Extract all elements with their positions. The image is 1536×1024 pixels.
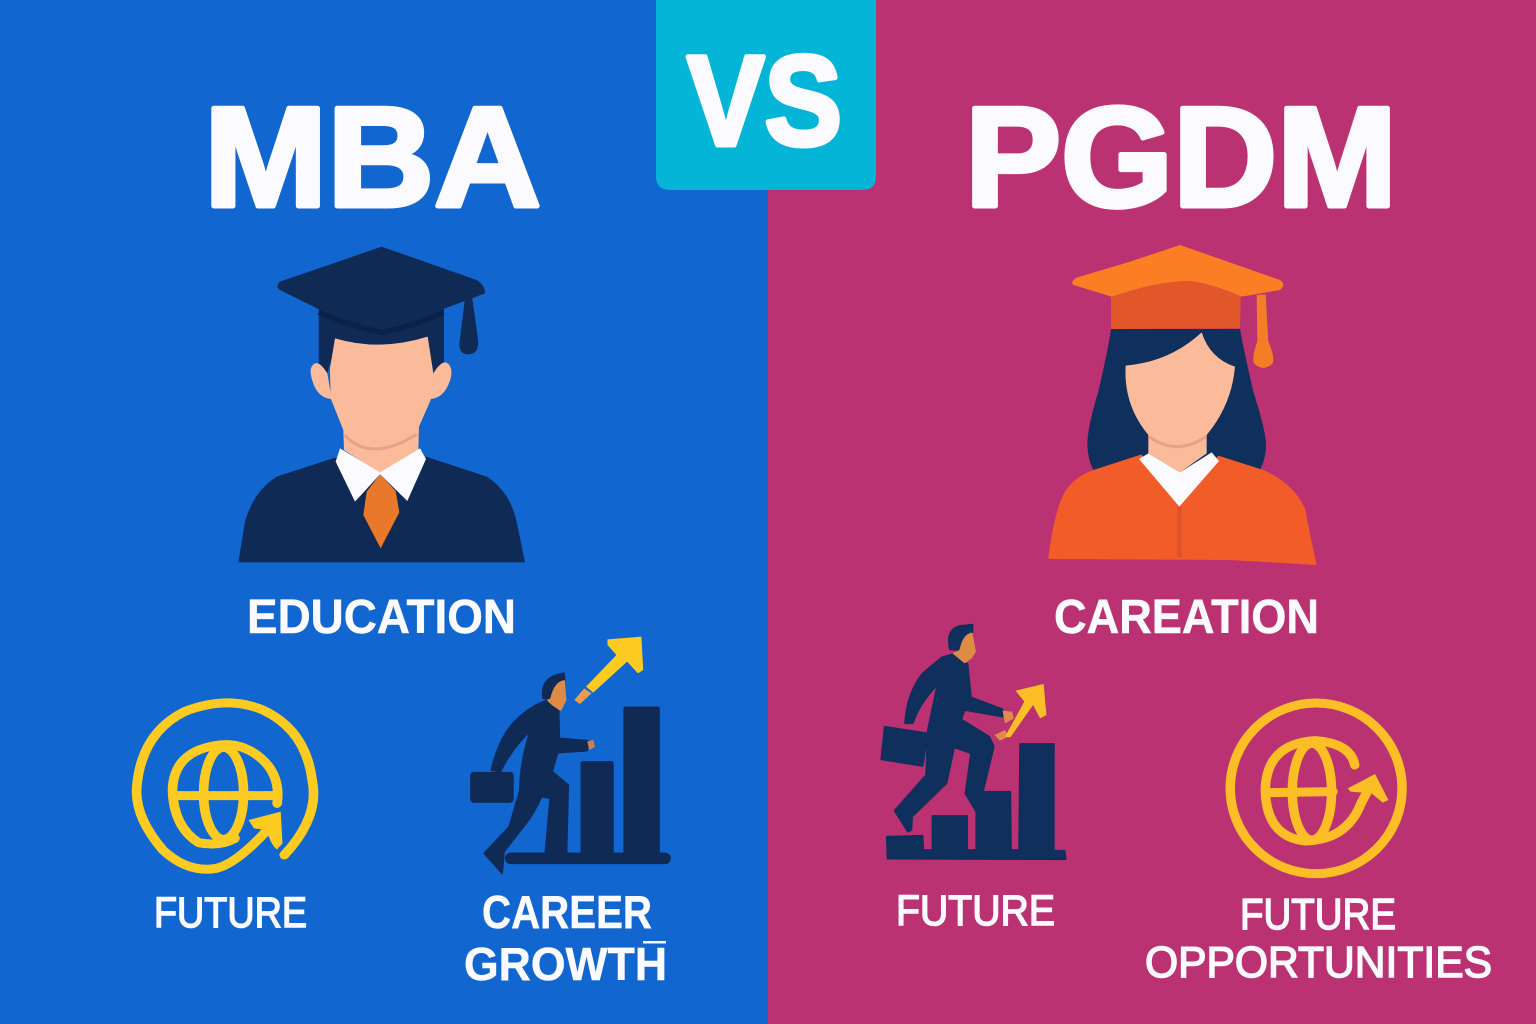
heading: MBA: MBA [204,78,541,237]
badge: VS: VS [687,30,842,173]
label: FUTURE (MBA): FUTURE [154,889,307,937]
icon: globe with arrow (PGDM) [1230,703,1402,874]
icon: career growth figure (PGDM) [881,625,1066,859]
heading: PGDM: PGDM [965,78,1397,237]
badge: VS [656,0,876,190]
label: EDUCATION: EDUCATION [247,591,516,644]
icon: female graduate [1048,245,1317,565]
icon: male graduate [238,247,525,562]
label: FUTURE OPPORTUNITIES: FUTURE [1240,890,1396,939]
label: FUTURE OPPORTUNITIES: OPPORTUNITIES [1145,938,1492,987]
icon: career growth figure (MBA) [471,637,670,873]
label: CAREER GROWTH: CAREER [482,886,652,938]
label: CAREATION: CAREATION [1054,591,1319,644]
label: FUTURE OPPORTUNITIES [1145,890,1492,987]
label: FUTURE (PGDM): FUTURE [896,887,1055,935]
icon: globe with arrow (MBA) [137,703,314,869]
panel: PGDM background [768,0,1536,1024]
label: CAREER GROWTH: GROWTH [464,938,667,990]
label: CAREER GROWTH [464,886,667,990]
panel: MBA background [0,0,768,1024]
